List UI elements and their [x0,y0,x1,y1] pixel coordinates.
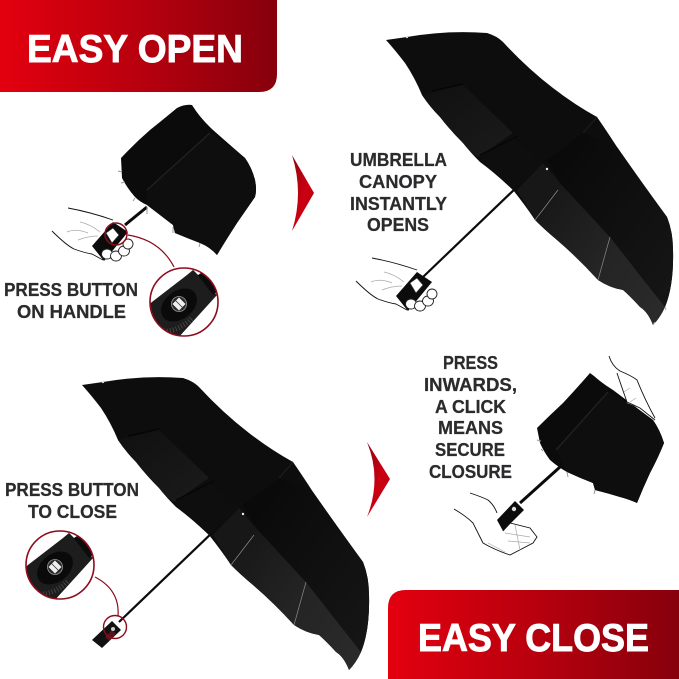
label: press inwards, a click means secure closure: CLOSURE [429,462,512,482]
hand holding handle [356,258,437,311]
open umbrella with handle: press to close [82,377,369,670]
label: umbrella canopy instantly opens: OPENS [367,215,429,235]
heading: easy open: EASY OPEN [27,28,243,71]
inset: handle button close-up [148,267,222,338]
label: umbrella canopy instantly opens: UMBRELLA [350,150,447,170]
lower hand [454,493,537,555]
label: press inwards, a click means secure closure: MEANS [438,418,503,438]
banner: easy open [0,0,277,92]
handle with highlighted button [92,616,126,648]
label: press inwards, a click means secure closure: A CLICK [435,397,506,417]
label: press button to close [5,480,139,522]
closed umbrella with hand pressing button [52,105,256,261]
label: press inwards, a click means secure closure: PRESS [443,353,498,373]
label: press button on handle [4,280,138,322]
label: umbrella canopy instantly opens: INSTANTLY [350,194,447,214]
open umbrella with hand [356,32,673,325]
label: umbrella canopy instantly opens: CANOPY [359,172,437,192]
label: press button on handle: PRESS BUTTON [4,280,138,300]
label: press button on handle: ON HANDLE [17,302,126,322]
label: press button to close: TO CLOSE [28,502,117,522]
callout connector: press button to close [95,577,118,616]
inset: handle button close-up [24,530,98,601]
arrow: close step [367,442,390,517]
callout connector: press button on handle [128,235,174,267]
closed umbrella pressed inwards by two hands [454,356,664,555]
label: press inwards, a click means secure closure [424,353,517,482]
upper hand [609,356,655,420]
label: press inwards, a click means secure closure: SECURE [435,440,505,460]
label: press button to close: PRESS BUTTON [5,480,139,500]
heading: easy close: EASY CLOSE [418,617,649,660]
label: press inwards, a click means secure closure: INWARDS, [424,375,517,395]
label: umbrella canopy instantly opens [350,150,447,235]
arrow: open step [292,155,314,231]
banner: easy close [388,590,679,679]
